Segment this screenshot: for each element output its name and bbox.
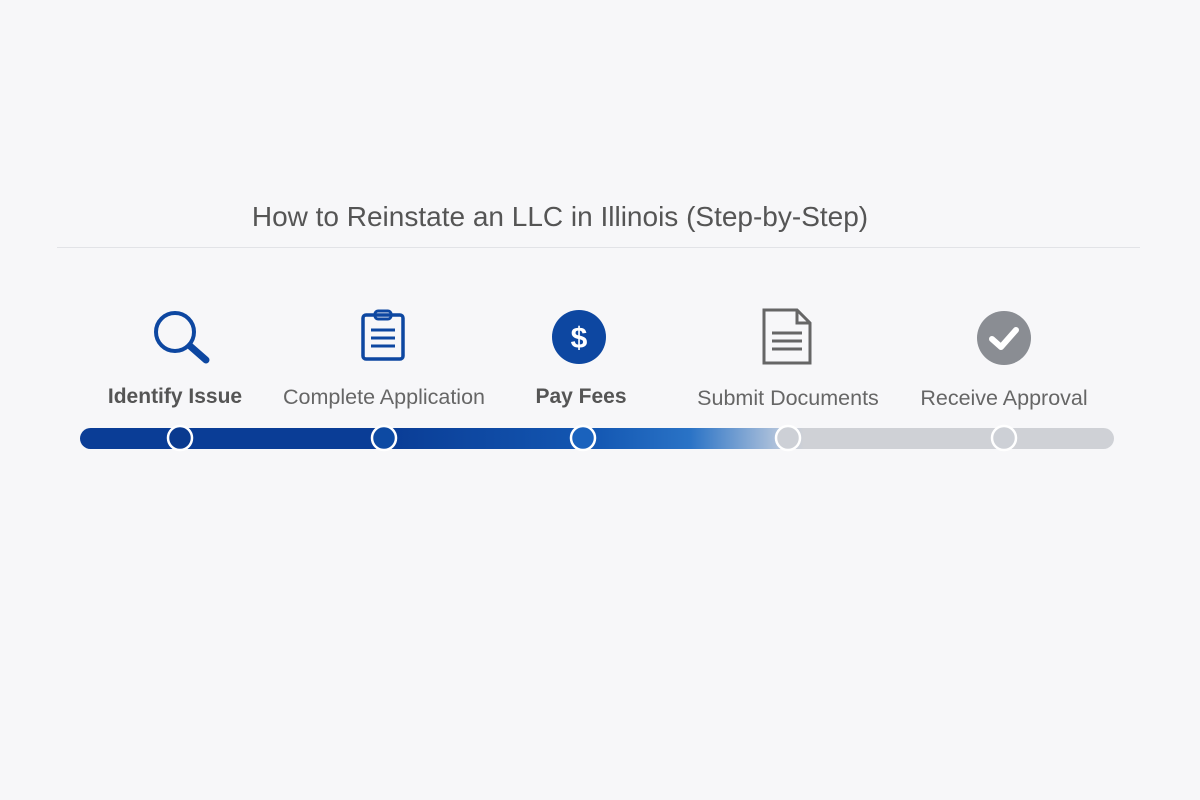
labels: [108, 385, 1088, 410]
labels: Submit Documents: [697, 386, 879, 410]
icon: magnifier: [154, 311, 210, 364]
icon: check: [977, 311, 1031, 365]
icon: dollar: $: [571, 322, 588, 355]
labels: Identify Issue: [108, 385, 242, 408]
progress bar: [80, 427, 1114, 449]
labels: Pay Fees: [535, 385, 627, 408]
icon: dollar: [552, 310, 606, 364]
labels: Complete Application: [283, 385, 485, 409]
icon: document: [762, 308, 812, 364]
labels: Receive Approval: [920, 386, 1088, 410]
title: How to Reinstate an LLC in Illinois (Step-by-Step): [252, 201, 868, 232]
icon: clipboard: [361, 310, 405, 361]
